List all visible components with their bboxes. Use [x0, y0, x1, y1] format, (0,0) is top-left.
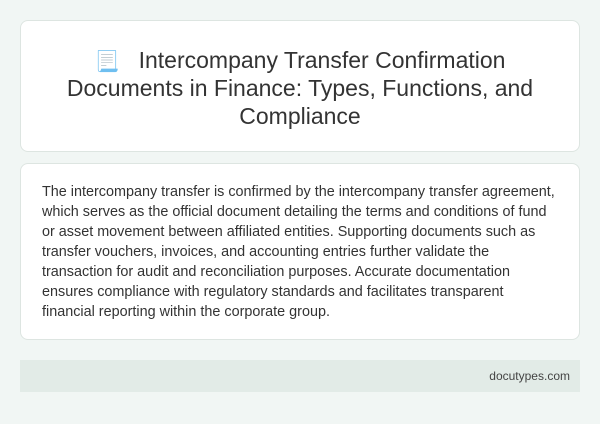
title panel [20, 20, 580, 152]
body text [42, 184, 555, 320]
body text: transaction for audit and reconciliation purposes. Accurate documentation [42, 264, 510, 280]
title: Documents in Finance: Types, Functions, and [67, 75, 533, 101]
footer [20, 360, 580, 392]
panel: description [20, 163, 580, 340]
footer: docutypes.com [489, 369, 570, 383]
title: Compliance [239, 103, 361, 129]
body text: transfer vouchers, invoices, and accounting entries further validate the [42, 244, 489, 260]
body text: ensures compliance with regulatory standards and facilitates transparent [42, 284, 504, 300]
title: 📃 Intercompany Transfer Confirmation [95, 47, 505, 73]
body text: The intercompany transfer is confirmed by the intercompany transfer agreement, [42, 184, 555, 200]
body text: or asset movement between affiliated entities. Supporting documents such as [42, 224, 535, 240]
body text: which serves as the official document detailing the terms and conditions of fund [42, 204, 546, 220]
title [67, 47, 533, 129]
body text: financial reporting within the corporate group. [42, 304, 330, 320]
